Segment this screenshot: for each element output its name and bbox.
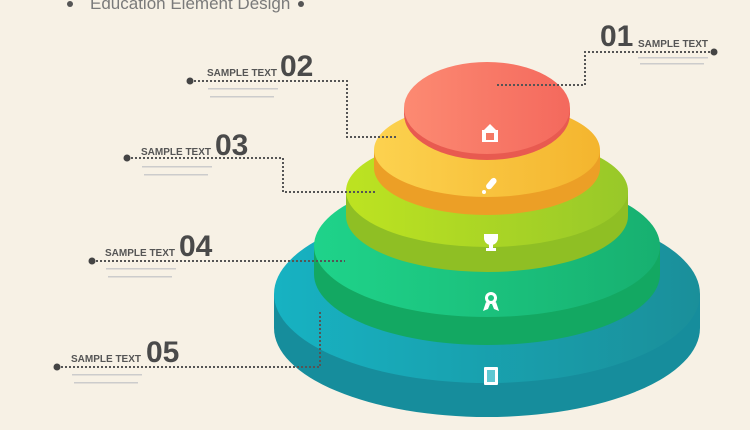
pyramid xyxy=(274,62,700,417)
icon: school xyxy=(482,124,498,142)
layer 4 green xyxy=(314,175,660,345)
callout 02: 02 xyxy=(280,50,313,83)
layer 2 orange xyxy=(374,103,600,215)
callout 01: SAMPLE TEXT xyxy=(638,39,708,50)
callout 03: SAMPLE TEXT xyxy=(141,147,211,158)
callout 01 xyxy=(600,20,718,64)
callout 04 xyxy=(88,230,213,278)
layer 1 red xyxy=(404,62,570,160)
icon: medal xyxy=(483,292,499,311)
callout 03 xyxy=(124,129,248,176)
layer 3 lime xyxy=(346,135,628,272)
connector lines xyxy=(57,52,714,367)
callout 05: SAMPLE TEXT xyxy=(71,354,141,365)
icon: rocket xyxy=(482,177,498,194)
callout 04: SAMPLE TEXT xyxy=(105,248,175,259)
callout 04: 04 xyxy=(179,230,213,263)
icon: trophy xyxy=(484,234,498,251)
callout 05 xyxy=(54,336,179,384)
callout 03: 03 xyxy=(215,129,248,162)
icon: book xyxy=(484,367,498,385)
callout 01: 01 xyxy=(600,20,633,53)
callout 02 xyxy=(186,50,313,98)
callout 02: SAMPLE TEXT xyxy=(207,68,277,79)
layer 5 teal xyxy=(274,205,700,417)
callout 05: 05 xyxy=(146,336,179,369)
